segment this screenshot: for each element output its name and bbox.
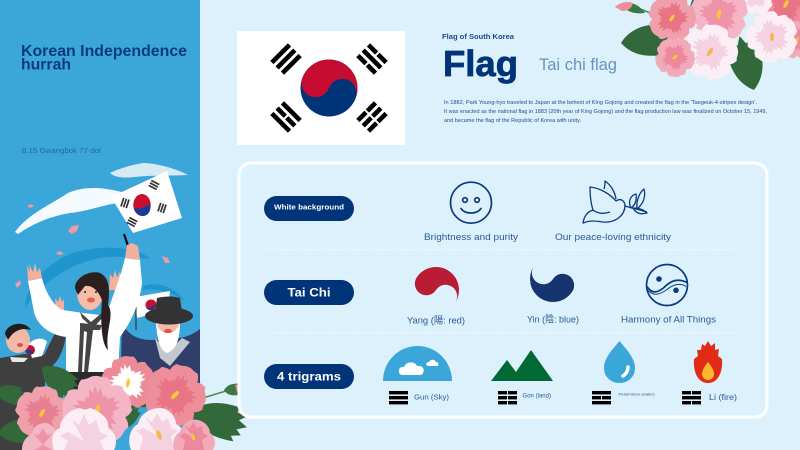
flag of South Korea	[237, 31, 405, 145]
description paragraph: and became the flag of the Republic of Korea with unity.	[444, 118, 581, 124]
flag: trigram top left	[270, 43, 302, 75]
illustration: big Korean flag	[111, 171, 182, 284]
subtitle: 8.15 Gwangbok 77-dol	[22, 146, 101, 155]
flag: trigram bottom right	[356, 101, 388, 133]
illustration: small swoosh	[143, 284, 185, 301]
trigram: Gon	[498, 391, 517, 404]
illustration: falling petals	[15, 204, 170, 288]
trigram: Persimmon	[592, 391, 611, 404]
illustration: upper cloud	[110, 163, 188, 178]
heading: Tai chi flag: Tai chi flag	[539, 55, 617, 74]
flag: trigram bottom left	[270, 101, 302, 133]
illustration: waving white banner	[15, 188, 126, 234]
illustration: crowd celebrating with flags	[0, 163, 254, 450]
illustration: blue swoosh	[25, 248, 150, 308]
label: Gun (Sky): Gun (Sky)	[414, 392, 450, 401]
flag: taegeuk	[292, 51, 366, 125]
label: peace-loving ethnicity: Our peace-loving ethnicity	[555, 232, 671, 243]
label: yin: Yin (陰: blue)	[527, 315, 579, 326]
illustration: flower bud	[203, 384, 254, 398]
label pill: Tai Chi	[264, 280, 354, 305]
row: white background	[264, 181, 671, 243]
icon: fire	[694, 341, 722, 383]
illustration: top right leaves	[620, 0, 781, 94]
eyebrow heading: Flag of South Korea	[442, 34, 514, 41]
icon: dove with olive branch	[583, 181, 647, 223]
description paragraph: It was enacted as the national flag in 1883 (20th year of King Gojong) and the flag production law was finalized on October 15, 1949,	[444, 109, 767, 115]
title second line: hurrah	[21, 56, 71, 74]
label pill: White background	[264, 196, 354, 221]
label pill: 4 trigrams: 4 trigrams	[277, 372, 341, 384]
label: Persimmon (water): Persimmon (water)	[618, 392, 654, 396]
icon: harmony circle	[646, 264, 688, 306]
trigram: Li	[682, 391, 701, 404]
illustration: girl in white hanbok	[27, 243, 142, 392]
label pill: 4 trigrams	[264, 364, 354, 389]
panel: symbol meanings card	[239, 163, 767, 417]
label: Gon (land): Gon (land)	[522, 394, 551, 400]
heading: Flag: Flag	[443, 43, 518, 84]
illustration: left leaves	[0, 357, 251, 445]
icon: mountains	[491, 350, 553, 381]
description paragraph	[444, 100, 767, 124]
illustration: old man in navy coat	[120, 296, 200, 400]
illustration: top right flowers	[615, 0, 800, 94]
icon: smiley	[450, 182, 492, 223]
icon: sky dome with clouds	[383, 346, 452, 381]
flag: trigram top right	[356, 43, 388, 75]
icon: yin blue	[521, 257, 579, 311]
label pill: White background: White background	[274, 202, 344, 212]
trigram: Gun	[389, 391, 408, 404]
label pill: Tai Chi: Tai Chi	[288, 288, 330, 300]
row: tai chi	[264, 257, 716, 327]
icon: water drop	[604, 341, 635, 383]
description paragraph: In 1882, Park Young-hyo traveled to Japan at the behest of King Gojong and created the flag in the 'Taegeuk-4-stripes design'.	[444, 100, 757, 106]
illustration: back flag	[135, 291, 170, 330]
illustration: foreground flowers	[7, 351, 219, 450]
label: Li (fire): Li (fire)	[709, 393, 737, 402]
label: harmony: Harmony of All Things	[621, 314, 716, 326]
label: yang: Yang (陽: red)	[407, 315, 465, 327]
icon: yang red	[410, 258, 468, 312]
row: 4 trigrams	[264, 341, 737, 404]
illustration: top right bud	[615, 2, 656, 15]
illustration: boy in dark uniform	[0, 324, 66, 450]
label: brightness and purity: Brightness and purity	[424, 232, 518, 243]
panel: left sidebar	[0, 0, 200, 450]
illustration: background hands	[55, 270, 122, 312]
title: Korean Independence	[21, 43, 187, 60]
